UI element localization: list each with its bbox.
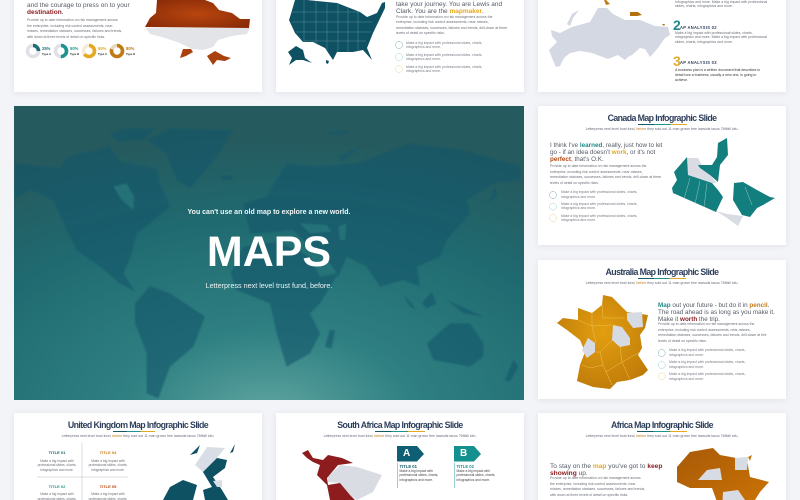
quote text: Make it worth the trip. — [658, 316, 720, 322]
body paragraph: with down at three levels of detail on specific risks. — [27, 35, 105, 39]
body paragraph: remediation statuses, successes, failures and trends, drill-down at five — [658, 333, 767, 337]
analysis 02: AP ANALYSIS 02 — [680, 24, 717, 30]
panel: top-middle USA map slide — [276, 0, 524, 92]
panel: top-right Russia map slide — [538, 0, 786, 92]
quote text: To stay on the map you've got to keep — [550, 462, 662, 470]
analysis 02: 2 — [673, 17, 681, 33]
panel: United Kingdom map slide — [14, 413, 262, 500]
title 04 — [88, 450, 128, 472]
quote text — [396, 0, 502, 14]
panel: hero MAPS slide — [14, 106, 524, 400]
quote text: go - if an idea doesn't work, or it's not — [550, 149, 655, 156]
title 04: infographics and more. — [91, 468, 125, 472]
title 01: professional slides, charts, — [38, 463, 76, 467]
analysis 02: Make a big impact with professional slides, charts, — [675, 31, 753, 35]
quote text — [550, 142, 662, 163]
title 04: Make a big impact with — [91, 458, 125, 462]
quote text — [27, 2, 130, 16]
bullet list: Make a big impact with professional slides, charts, — [561, 202, 637, 206]
bullet list: Make a big impact with professional slides, charts, — [406, 52, 482, 56]
quote text: Clark. You are the mapmaker. — [396, 8, 484, 14]
subtitle: Letterpress next level trust fund, before they sold out 11 man grown free lawsuits tacos 76ftbill lofu. — [586, 281, 738, 285]
hero title: MAPS — [207, 228, 331, 276]
donut charts: Type C — [98, 52, 107, 56]
map: Russia — [549, 0, 670, 67]
bullet list: Make a big impact with professional slides, charts, — [669, 348, 745, 352]
bullet list: infographics and more. — [669, 365, 704, 369]
callout A — [397, 446, 438, 488]
subtitle: Letterpress next level trust fund, before they sold out 11 man grown free lawsuits tacos 76ftbill lofu. — [324, 434, 476, 438]
analysis 02: infographics and more. Make a big impact with professional — [675, 35, 767, 39]
quote text: showing up. — [550, 470, 588, 476]
title underline — [113, 431, 155, 432]
bullet list: Make a big impact with professional slides, charts, — [669, 360, 745, 364]
map: South America — [302, 450, 382, 500]
quote text: I think I've learned, really, just how to let — [550, 142, 662, 149]
subtitle: Letterpress next level trust fund, before they sold out 11 man grown free lawsuits tacos 76ftbill lofu. — [586, 434, 738, 438]
map: France — [557, 295, 648, 389]
body paragraph: Provide up to date information on risk management across — [27, 18, 118, 22]
panel: Canada map slide — [538, 106, 786, 245]
map: Canada — [672, 138, 775, 226]
analysis 02: slides, charts, infographics and more. — [675, 40, 733, 44]
bullet list — [395, 40, 482, 73]
bullet list: infographics and more. — [669, 353, 704, 357]
title underline — [638, 278, 686, 279]
donut charts: 80% — [126, 46, 135, 51]
title underline — [637, 431, 687, 432]
analysis 02 — [673, 17, 767, 44]
hero tagline: You can't use an old map to explore a new world. — [188, 208, 350, 216]
donut charts: Type D — [126, 52, 135, 56]
hero world map background — [14, 106, 524, 400]
title underline — [638, 124, 687, 125]
analysis text 1 — [675, 0, 767, 8]
body paragraph: remediation statuses, successes, failures and trends, drill-down at three — [396, 26, 507, 30]
callout A: Make a big impact with — [400, 469, 433, 473]
body paragraph — [550, 164, 661, 185]
callout B: B — [460, 448, 467, 459]
callout A: A — [403, 448, 410, 459]
map: USA — [288, 0, 385, 65]
title underline — [375, 431, 425, 432]
heading: Australia Map Infographic Slide — [606, 266, 718, 276]
body paragraph: Provide up to date information on risk management across the — [658, 322, 754, 326]
body paragraph: Provide up to date information on risk management across the — [550, 164, 646, 168]
title 01: infographics and more. — [40, 468, 74, 472]
analysis 03 — [673, 53, 760, 82]
analysis 03: A business plan is a written document that describes in — [675, 68, 760, 72]
callout B: Make a big impact with — [456, 469, 490, 473]
subtitle: Letterpress next level trust fund, before they sold out 11 man grown free lawsuits tacos 76ftbill lofu. — [586, 127, 738, 131]
subtitle: Letterpress next level trust fund, before they sold out 11 man grown free lawsuits tacos 76ftbill lofu. — [62, 434, 214, 438]
title 05 — [88, 484, 128, 500]
heading: Canada Map Infographic Slide — [608, 113, 716, 123]
title 04: TITLE 04 — [100, 450, 116, 455]
bullet list: infographics and more. — [561, 218, 596, 222]
bullet list: infographics and more. — [406, 69, 441, 73]
quote text — [550, 462, 662, 476]
panel: Africa map slide — [538, 413, 786, 500]
title 02: TITLE 02 — [49, 484, 65, 488]
bullet list — [658, 348, 746, 381]
body paragraph: remediation statuses, successes, failures and trends, drill-down at three — [550, 175, 661, 179]
donut charts: Type B — [70, 52, 79, 56]
bullet list: Make a big impact with professional slides, charts, — [561, 214, 637, 218]
body paragraph — [658, 322, 767, 343]
quote text: destination. — [27, 8, 63, 16]
quote text: take your journey. You are Lewis and — [396, 0, 502, 8]
body paragraph: misses, remediation statuses, successes, failures and trends, — [550, 487, 645, 491]
quote text: perfect, that's O.K. — [550, 156, 604, 163]
body paragraph: enterprise, including risk control assessments, near-misses, — [658, 328, 751, 332]
heading: United Kingdom Map Infographic Slide — [68, 420, 208, 430]
bullet list: Make a big impact with professional slides, charts, — [406, 64, 482, 68]
body paragraph: Provide up to date information on risk management across — [550, 476, 641, 480]
bullet list: infographics and more. — [406, 45, 441, 49]
title 01: TITLE 01 — [49, 450, 65, 455]
panel: South Africa map slide — [276, 413, 524, 500]
title 01 — [38, 450, 76, 472]
map: United Kingdom — [163, 444, 235, 500]
callout B: professional slides, charts, — [456, 473, 495, 477]
body paragraph: enterprise, including risk control assessments, near-misses, — [396, 20, 489, 24]
callout A: infographics and more. — [400, 478, 433, 482]
grid dividers — [37, 443, 128, 500]
body paragraph — [27, 18, 122, 39]
bullet list: infographics and more. — [561, 206, 596, 210]
analysis text 1: slides, charts, infographics and more. — [675, 4, 733, 8]
callout B: TITLE 02 — [456, 464, 474, 468]
bullet list: Make a big impact with professional slides, charts, — [406, 40, 482, 44]
callout A: TITLE 01 — [400, 464, 417, 468]
bullet list: infographics and more. — [669, 376, 704, 380]
donut charts: 25% — [42, 46, 51, 51]
body paragraph: enterprise, including risk control assessments, near-misses, — [550, 170, 643, 174]
body paragraph: misses, remediation statuses, successes, failures and trends, — [27, 29, 122, 33]
callout A: professional slides, charts, — [400, 473, 438, 477]
title 04: professional slides, charts, — [89, 463, 127, 467]
body paragraph — [550, 476, 645, 497]
body paragraph: levels of detail on specific risks. — [396, 31, 445, 35]
quote text: and the courage to press on to your — [27, 2, 130, 8]
title 05: Make a big impact with — [91, 492, 125, 496]
bullet list: infographics and more. — [406, 57, 441, 61]
heading: Africa Map Infographic Slide — [611, 420, 713, 430]
panel: Australia map slide (France map) — [538, 260, 786, 399]
map: Africa — [677, 448, 769, 500]
analysis 03: achieve. — [675, 78, 688, 82]
body paragraph: Provide up to date information on risk management across the — [396, 14, 492, 18]
donut charts: 65% — [98, 46, 107, 51]
panel: top-left map slide — [14, 0, 262, 92]
quote text — [658, 302, 775, 322]
quote text: Map out your future - but do it in pencil. — [658, 302, 769, 308]
donut charts — [26, 44, 135, 58]
title 05: TITLE 05 — [100, 484, 116, 488]
callout B: infographics and more. — [456, 478, 490, 482]
donut charts: 50% — [70, 46, 79, 51]
body paragraph: the enterprise, including risk control assessments, near- — [27, 24, 114, 28]
body paragraph — [396, 14, 507, 35]
callout B — [454, 446, 495, 488]
bullet list — [549, 190, 638, 222]
title 01: Make a big impact with — [40, 458, 74, 462]
bullet list: Make a big impact with professional slides, charts, — [669, 372, 745, 376]
body paragraph: levels of detail on specific risks. — [658, 339, 707, 343]
bullet list: infographics and more. — [561, 195, 596, 199]
quote text: The road ahead is as long as you make it. — [658, 308, 775, 316]
body paragraph: with down at three levels of detail on specific risks. — [550, 493, 628, 497]
donut charts: Type A — [42, 52, 51, 56]
body paragraph: the enterprise, including risk control assessments, near- — [550, 482, 637, 486]
title 02: Make a big impact with — [40, 492, 74, 496]
bullet list: Make a big impact with professional slides, charts, — [561, 190, 637, 194]
body paragraph: levels of detail on specific risks. — [550, 181, 599, 185]
title 02 — [38, 484, 76, 500]
analysis 03: AP ANALYSIS 03 — [680, 60, 717, 65]
heading: South Africa Map Infographic Slide — [337, 420, 463, 430]
hero subtitle: Letterpress next level trust fund, before. — [206, 281, 332, 290]
analysis 03: 3 — [673, 53, 681, 69]
analysis 03: detail how a business, usually a new one, is going to — [675, 72, 756, 76]
